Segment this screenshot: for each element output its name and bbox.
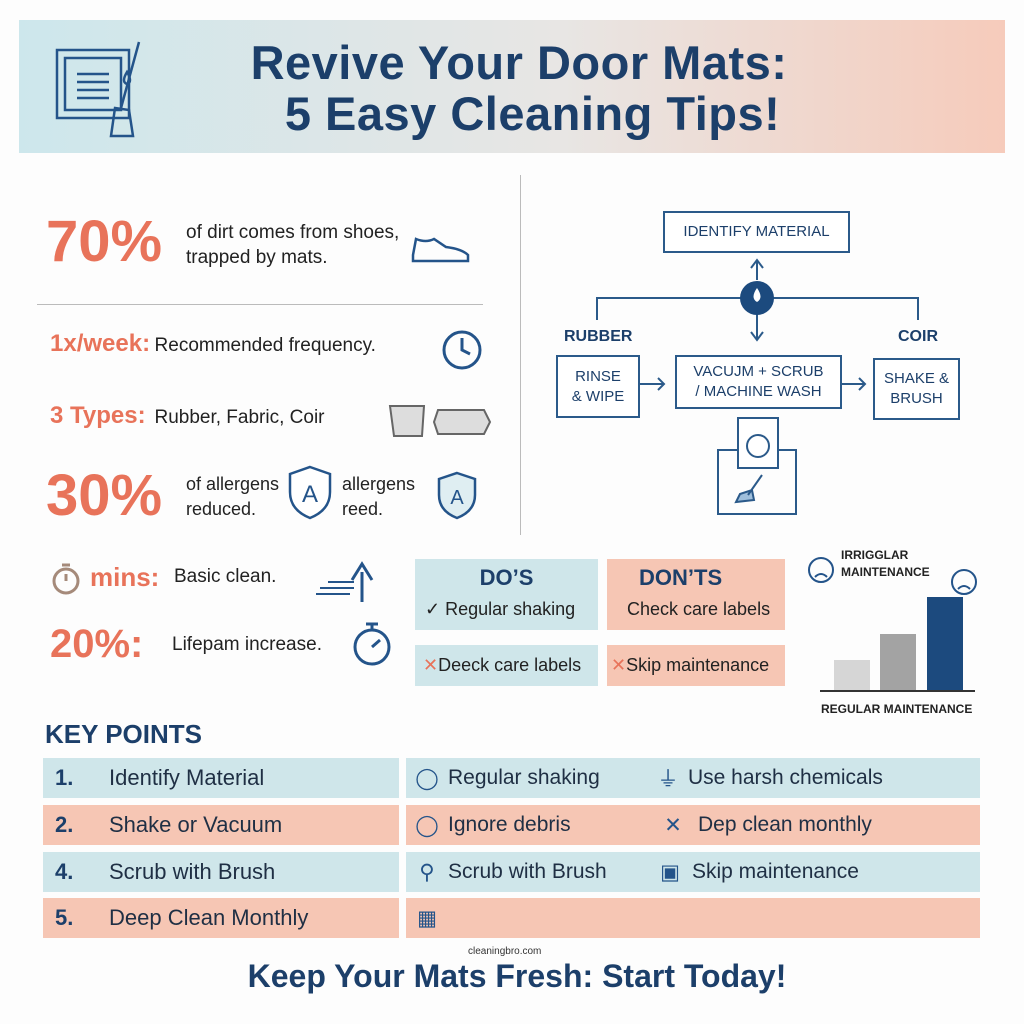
stat: lifespan: Lifepam increase. — [172, 634, 322, 655]
icon: shield — [288, 466, 332, 520]
stat: 70%: 70% — [46, 209, 162, 274]
box: identify material: IDENTIFY MATERIAL — [683, 223, 830, 240]
icon: shoe — [412, 237, 470, 262]
footer tagline: Keep Your Mats Fresh: Start Today! — [248, 958, 786, 994]
icon: shield 2 — [438, 472, 476, 520]
title: 5 Easy Cleaning Tips! — [285, 87, 780, 140]
key points table: Use harsh chemicals — [688, 766, 883, 789]
key points table: 4. — [55, 859, 73, 884]
key points table: Scrub with Brush — [448, 860, 607, 883]
stat: types — [50, 402, 491, 437]
key points table: Skip maintenance — [692, 860, 859, 883]
icon: clock — [442, 330, 482, 370]
header banner — [19, 20, 1005, 153]
key points table: Scrub with Brush — [109, 859, 275, 884]
key points table: Shake or Vacuum — [109, 812, 282, 837]
do's and don'ts: Check care labels — [627, 599, 770, 619]
key points table — [43, 758, 980, 938]
stat: frequency: 1x/week: Recommended frequency. — [50, 330, 376, 357]
box: shake: SHAKE & — [884, 370, 949, 387]
key points table: 5. — [55, 905, 73, 930]
bar chart — [808, 548, 977, 716]
key points table: Regular shaking — [448, 766, 600, 789]
stat: frequency — [50, 330, 482, 370]
icon: speed arrow — [316, 561, 374, 602]
stat: allergens: allergens — [342, 474, 415, 494]
box: rinse: & WIPE — [572, 388, 624, 404]
stat: mins: Basic clean. — [174, 566, 276, 587]
key points table: ⏚ — [658, 768, 678, 791]
key points table: Ignore debris — [448, 813, 571, 836]
stat: 70%: trapped by mats. — [186, 247, 328, 268]
key points table: Dep clean monthly — [698, 813, 872, 836]
do's and don'ts: ✕Deeck care labels — [423, 655, 581, 675]
key points table: Identify Material — [109, 765, 264, 790]
key points table: ▣ — [660, 860, 680, 884]
label: rubber: RUBBER — [564, 328, 632, 345]
do's and don'ts: DON’TS — [639, 565, 722, 590]
box: rinse: RINSE — [575, 368, 621, 384]
box: vacuum: / MACHINE WASH — [695, 383, 822, 400]
title: Revive Your Door Mats: — [251, 36, 787, 89]
box: vacuum: VACUJM + SCRUB — [693, 363, 824, 380]
bar chart: IRRIGGLAR — [841, 548, 908, 562]
stat: allergens: 30% — [46, 463, 162, 528]
icon: shield: A — [302, 481, 318, 508]
icon: stopwatch — [354, 622, 390, 666]
bar chart: MAINTENANCE — [841, 565, 930, 579]
stat: lifespan: 20%: — [50, 622, 143, 666]
key points table: ✕ — [664, 814, 682, 836]
key points table: ⚲ — [419, 860, 435, 884]
box: rinse — [556, 355, 640, 418]
icon: mat with broom — [56, 42, 140, 138]
key points table: ◯ — [415, 814, 439, 836]
stat: 70% — [46, 209, 470, 274]
title — [251, 36, 787, 140]
stat: allergens: reduced. — [186, 499, 256, 519]
key points table: 1. — [55, 765, 73, 790]
box: identify material — [663, 211, 850, 253]
stat: allergens: reed. — [342, 499, 383, 519]
stat: mins: mins: — [90, 562, 159, 592]
icon: shield 2: A — [450, 487, 464, 509]
heading: key points: KEY POINTS — [45, 719, 202, 749]
stat: types: 3 Types: Rubber, Fabric, Coir — [50, 402, 324, 429]
bar chart: REGULAR MAINTENANCE — [821, 702, 972, 716]
box: shake — [873, 358, 960, 420]
source: cleaningbro.com — [468, 946, 541, 957]
key points table: ▦ — [417, 906, 437, 930]
stat: allergens: of allergens — [186, 474, 279, 494]
do's and don'ts — [415, 559, 785, 686]
key points table: 2. — [55, 812, 73, 837]
flowchart — [556, 211, 960, 515]
do's and don'ts: DO’S — [480, 565, 533, 590]
box: shake: BRUSH — [890, 390, 943, 407]
stat: lifespan — [50, 622, 390, 666]
stat: mins — [52, 561, 374, 602]
box: vacuum — [675, 355, 842, 409]
label: coir: COIR — [898, 328, 938, 345]
stat: 70%: of dirt comes from shoes, — [186, 222, 399, 243]
do's and don'ts: ✓ Regular shaking — [425, 599, 575, 619]
stat: allergens — [46, 463, 476, 528]
key points table: ◯ — [415, 766, 439, 790]
do's and don'ts: ✕Skip maintenance — [611, 655, 769, 675]
icon: mat shapes — [388, 405, 491, 437]
key points table: Deep Clean Monthly — [109, 905, 308, 930]
